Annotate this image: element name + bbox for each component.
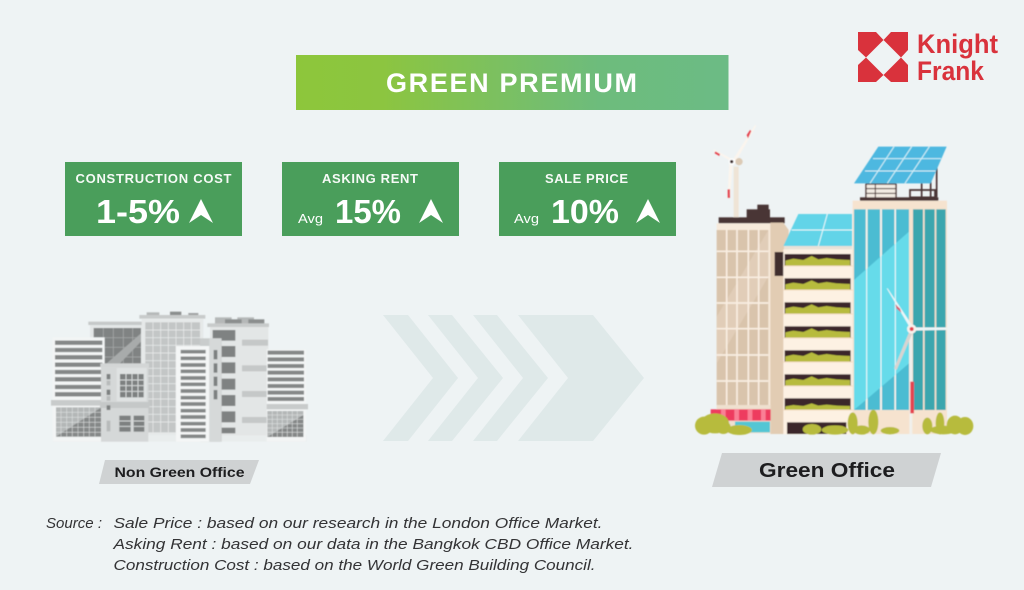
back left building — [88, 322, 143, 368]
icon: up arrow — [419, 199, 443, 223]
logo: Knight Frank: Knight — [917, 29, 998, 59]
panel: construction cost — [65, 162, 242, 236]
panel: construction cost: CONSTRUCTION COST — [76, 171, 232, 186]
source notes: Source : — [46, 516, 102, 532]
label: green office — [712, 453, 941, 487]
logo: Knight Frank: Frank — [917, 56, 985, 86]
arrow: chevrons — [383, 315, 644, 441]
left building — [51, 337, 106, 441]
panel: asking rent: Avg — [298, 211, 323, 226]
middle planted building — [783, 214, 853, 434]
front tall striped building — [176, 338, 222, 442]
icon: up arrow — [636, 199, 660, 223]
illustration: green office buildings — [695, 125, 973, 435]
label: non green office: Non Green Office — [114, 464, 245, 480]
panel: asking rent: 15% — [335, 193, 401, 230]
tan tower — [711, 205, 789, 434]
logo: Knight Frank — [858, 29, 998, 86]
panel: sale price: 10% — [551, 193, 619, 230]
source notes: Sale Price : based on our research in the London Office Market. — [114, 516, 602, 532]
label: green office: Green Office — [759, 460, 895, 482]
panel: asking rent: ASKING RENT — [322, 171, 418, 186]
shrubs — [695, 410, 973, 435]
source notes — [46, 516, 634, 574]
wind turbine on roof — [713, 125, 756, 218]
panel: asking rent — [282, 162, 459, 236]
title text: GREEN PREMIUM — [386, 68, 637, 98]
panel: sale price: SALE PRICE — [545, 171, 628, 186]
panel: sale price — [499, 162, 676, 236]
solar panel — [854, 147, 947, 201]
glass tower — [853, 201, 947, 434]
right building — [267, 349, 308, 441]
illustration: non green office buildings — [51, 312, 308, 442]
right back building — [207, 317, 269, 435]
icon: up arrow — [189, 199, 213, 223]
label: non green office — [99, 460, 259, 484]
wind turbine in front — [887, 288, 947, 434]
panel: construction cost: 1-5% — [96, 193, 180, 230]
source notes: Asking Rent : based on our data in the Bangkok CBD Office Market. — [112, 537, 633, 553]
panel: sale price: Avg — [514, 211, 539, 226]
centre tower — [139, 312, 205, 435]
front low building — [100, 363, 149, 442]
title banner — [296, 55, 728, 110]
source notes: Construction Cost : based on the World Green Building Council. — [114, 558, 596, 574]
